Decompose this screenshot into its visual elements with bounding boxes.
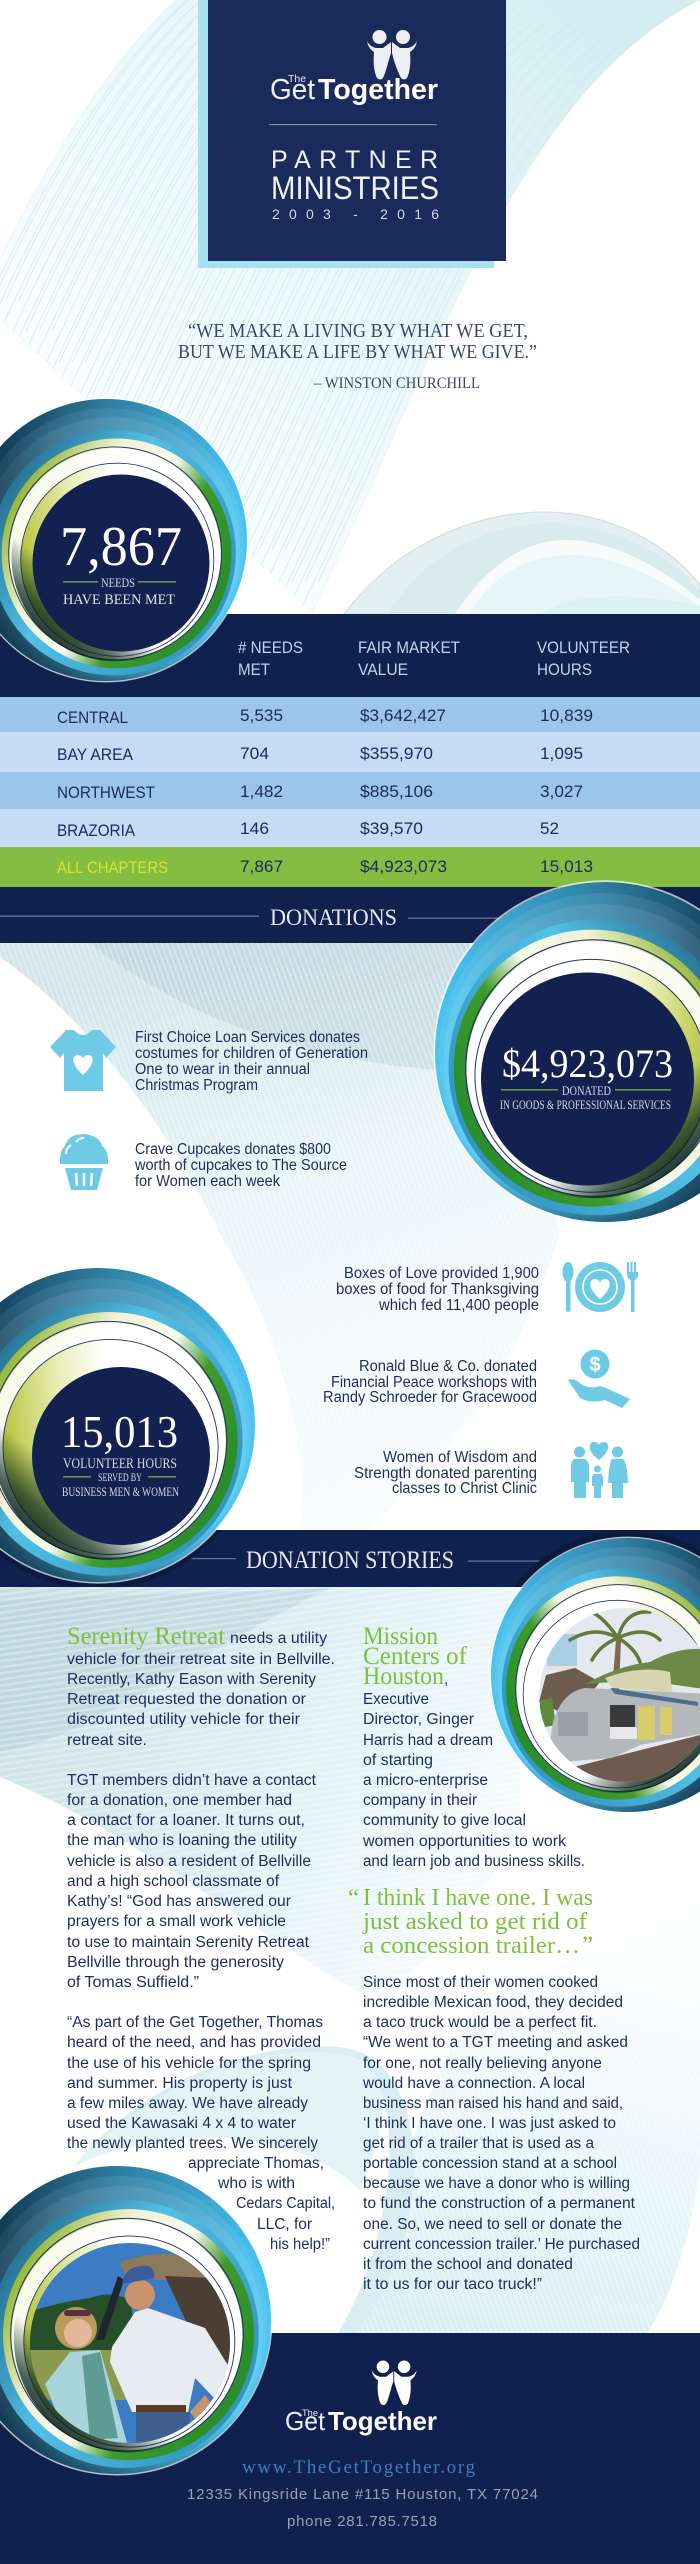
text: women of wisdom: Strength donated parenting [354,1465,537,1482]
story: serenity retreat: the use of his vehicle for the spring [67,2055,311,2072]
story: serenity retreat: vehicle is also a resident of Bellville [67,1853,311,1870]
story: mission centers of houston: portable concession stand at a school [363,2155,617,2172]
table column headers [238,638,630,679]
stat circle: volunteer hours: 15,013 [61,1406,178,1457]
title: partner ministries: MINISTRIES [271,170,439,206]
story: mission centers of houston: because we have a donor who is willing [363,2175,630,2192]
table column headers: HOURS [537,660,592,679]
row: northwest: $885,106 [360,782,433,801]
story: mission centers of houston: current concession trailer.’ He purchased [363,2236,640,2253]
row: central: 10,839 [540,706,593,725]
text: women of wisdom [354,1449,537,1497]
story: serenity retreat: to use to maintain Serenity Retreat [67,1934,310,1951]
text: crave cupcakes: Crave Cupcakes donates $800 [135,1141,331,1158]
story: serenity retreat: appreciate Thomas, [188,2155,324,2172]
row: brazoria: BRAZORIA [57,821,136,840]
text: ronald blue: Ronald Blue & Co. donated [359,1358,537,1375]
stat circle: needs met [0,398,248,682]
story: serenity retreat: LLC, for [257,2216,312,2233]
row: all chapters: 15,013 [540,857,593,876]
story: mission centers of houston: Harris had a dream [363,1732,493,1749]
row: brazoria: $39,570 [360,819,423,838]
story: mission centers of houston: Director, Ginger [363,1711,474,1728]
story: serenity retreat: “As part of the Get Together, Thomas [67,2014,323,2031]
row: brazoria: 52 [540,819,559,838]
story: mission centers of houston: would have a connection. A local [362,2075,585,2092]
footer panel [0,2333,700,2564]
story: mission centers of houston [348,1623,640,2293]
row: central: 5,535 [240,706,283,725]
text: boxes of love: which fed 11,400 people [378,1297,539,1314]
story: mission centers of houston: it from the school and donated [363,2256,573,2273]
row: central: CENTRAL [57,708,128,727]
story: mission centers of houston: one. So, we need to sell or donate the [363,2216,622,2233]
header shadow [198,0,494,268]
text: first choice loan services: First Choice Loan Services donates [135,1029,360,1046]
photo: truck scene [535,1604,700,1790]
story: serenity retreat: for a donation, one member had [67,1792,292,1809]
pull quote: just asked to get rid of [362,1909,587,1935]
story: serenity retreat: of Tomas Suffield.” [67,1974,199,1991]
quote: BUT WE MAKE A LIFE BY WHAT WE GIVE.” [178,341,537,363]
story: mission centers of houston: Since most of their women cooked [363,1974,598,1991]
quote: “WE MAKE A LIVING BY WHAT WE GET, [188,320,528,342]
story: mission centers of houston: of starting [363,1752,433,1769]
table column headers: VALUE [358,660,408,679]
row: all chapters: ALL CHAPTERS [57,858,168,877]
story: serenity retreat: needs a utility [230,1630,327,1647]
pull quote: a concession trailer… [363,1933,580,1959]
story: serenity retreat: the newly planted trees. We sincerely [67,2135,318,2152]
row: all chapters: 7,867 [240,857,283,876]
table header band [0,614,700,697]
row: northwest: 1,482 [240,782,283,801]
story: serenity retreat: a few miles away. We have already [67,2095,308,2112]
stat circle: donated [433,880,700,1224]
story: serenity retreat: who is with [217,2175,295,2192]
text: boxes of love: boxes of food for Thanksgiving [336,1281,539,1298]
stat circle: donated: $4,923,073 [502,1041,673,1086]
story heading: mission centers: , [444,1671,448,1688]
stat circle: needs met: 7,867 [60,516,182,578]
story: mission centers of houston: a micro-enterprise [363,1772,488,1789]
row: all chapters [0,847,700,887]
story: serenity retreat: prayers for a small work vehicle [67,1913,286,1930]
story: mission centers of houston: business man raised his hand and said, [363,2095,623,2112]
donation stories heading band: DONATION STORIES [246,1547,454,1574]
text: first choice loan services [135,1029,368,1094]
icon: hand with coin: $ [589,1354,601,1376]
table column headers: # NEEDS [238,638,303,657]
story: serenity retreat: a contact for a loaner. It turns out, [67,1812,305,1829]
story: mission centers of houston: to fund the construction of a permanent [363,2195,636,2212]
donations heading band [0,887,700,943]
story: mission centers of houston: Executive [363,1691,429,1708]
row: northwest: NORTHWEST [57,783,155,802]
pull quote: ” [582,1932,593,1959]
photo circle: taco truck [486,1530,700,1814]
story: mission centers of houston: company in their [363,1792,477,1809]
story: mission centers of houston: get rid of a trailer that is used as a [363,2135,594,2152]
icon: t-shirt [50,1030,116,1091]
text: boxes of love [336,1265,539,1314]
icon: cupcake [60,1134,108,1190]
text: ronald blue: Financial Peace workshops with [331,1374,537,1391]
story: mission centers of houston: it to us for our taco truck!” [363,2276,542,2293]
quote [178,320,537,392]
title: partner ministries: PARTNER [271,146,438,174]
footer logo wordmark: The [302,2408,318,2418]
row: northwest: 3,027 [540,782,583,801]
footer website: www.TheGetTogether.org [242,2457,476,2478]
story: serenity retreat: Recently, Kathy Eason with Serenity [67,1671,316,1688]
row: northwest [0,772,700,809]
donation stories heading band [0,1530,700,1587]
story: mission centers of houston: and learn job and business skills. [363,1853,585,1870]
icon: family [571,1442,628,1498]
row: bay area: 1,095 [540,744,583,763]
story: mission centers of houston: incredible Mexican food, they decided [363,1994,623,2011]
story: serenity retreat: TGT members didn’t have a contact [67,1772,317,1789]
pull quote: “ [348,1885,359,1912]
row: all chapters: $4,923,073 [360,857,447,876]
icon: hand with coin [568,1350,630,1408]
logo: figures [367,30,417,80]
header panel [198,0,506,268]
photo circle: two people [0,2164,273,2476]
story: serenity retreat: and summer. His property is just [67,2075,293,2092]
title: partner ministries [271,146,439,222]
text: women of wisdom: classes to Christ Clinic [392,1480,537,1497]
story: mission centers of houston: for one, not really believing anyone [363,2055,602,2072]
row: brazoria: 146 [240,819,269,838]
footer logo figures [372,2360,417,2405]
text: women of wisdom: Women of Wisdom and [383,1449,537,1466]
row: bay area: 704 [240,744,269,763]
story: mission centers of houston: a taco truck would be a perfect fit. [363,2014,597,2031]
story: mission centers of houston: community to give local [363,1812,526,1829]
story: serenity retreat: discounted utility vehicle for their [67,1711,300,1728]
text: first choice loan services: costumes for children of Generation [135,1045,368,1062]
story heading: mission centers: Mission [363,1623,438,1650]
logo: wordmark: Together [318,74,438,106]
stat circle: donated: DONATED [562,1083,611,1098]
story: serenity retreat: Retreat requested the donation or [67,1691,306,1708]
text: first choice loan services: One to wear in their annual [135,1061,310,1078]
row: brazoria [0,809,700,847]
table panel [0,614,700,887]
table column headers: MET [238,660,270,679]
story heading: mission centers: Houston [363,1663,444,1690]
title: partner ministries: 2003 - 2016 [272,206,439,222]
story: serenity retreat [67,1623,335,2253]
story: mission centers of houston: women opportunities to work [362,1833,566,1850]
footer logo wordmark: Get [285,2406,326,2436]
story: serenity retreat: the man who is loaning the utility [67,1832,297,1849]
stat circle: needs met: HAVE BEEN MET [63,592,175,608]
pull quote [348,1885,593,1959]
story heading: mission centers: Centers of [363,1643,468,1670]
stat circle: volunteer hours: VOLUNTEER HOURS [63,1456,177,1472]
text: first choice loan services: Christmas Program [135,1077,258,1094]
story: serenity retreat: Kathy’s! “God has answered our [67,1893,291,1910]
stat circle: volunteer hours [0,1266,258,1589]
row: central: $3,642,427 [360,706,446,725]
stat circle: volunteer hours: BUSINESS MEN & WOMEN [62,1484,179,1499]
donations heading band: DONATIONS [270,905,397,930]
text: crave cupcakes: worth of cupcakes to The Source [134,1157,347,1174]
story: serenity retreat: his help!” [270,2236,330,2253]
story: serenity retreat: retreat site. [67,1732,147,1749]
story: mission centers of houston: “We went to a TGT meeting and asked [363,2034,628,2051]
footer address: 12335 Kingsride Lane #115 Houston, TX 77024 [187,2486,538,2503]
stat circle: needs met: NEEDS [101,575,135,590]
quote: – WINSTON CHURCHILL [313,375,480,392]
stat circle: volunteer hours: SERVED BY [98,1470,142,1484]
story: serenity retreat: and a high school classmate of [67,1873,280,1890]
row: bay area: BAY AREA [57,745,134,764]
story: serenity retreat: heard of the need, and has provided [67,2034,321,2051]
row: bay area [0,732,700,772]
table column headers: FAIR MARKET [358,638,460,657]
text: ronald blue: Randy Schroeder for Gracewood [323,1389,537,1406]
icon: plate and cutlery [562,1262,638,1312]
text: crave cupcakes: for Women each week [135,1173,280,1190]
story: serenity retreat: used the Kawasaki 4 x 4 to water [67,2115,296,2132]
logo: wordmark: Get [270,74,315,106]
pull quote: I think I have one. I was [363,1885,593,1911]
story heading: mission centers [363,1623,468,1690]
story: serenity retreat: Cedars Capital, [236,2195,335,2212]
header navy box [208,0,506,261]
story heading: serenity retreat: Serenity Retreat [67,1623,225,1650]
text: boxes of love: Boxes of Love provided 1,900 [344,1265,539,1282]
table column headers: VOLUNTEER [537,638,630,657]
row: bay area: $355,970 [360,744,433,763]
photo: two people [28,2240,235,2446]
logo: wordmark: The [288,74,306,85]
row: central [0,697,700,732]
story: mission centers of houston: ‘I think I have one. I was just asked to [363,2115,616,2132]
story: serenity retreat: vehicle for their retreat site in Bellville. [67,1651,335,1668]
text: crave cupcakes [134,1141,347,1190]
footer logo wordmark: Together [328,2406,437,2436]
text: ronald blue [323,1358,537,1406]
story: serenity retreat: Bellville through the generosity [67,1954,284,1971]
footer phone: phone 281.785.7518 [287,2513,437,2530]
